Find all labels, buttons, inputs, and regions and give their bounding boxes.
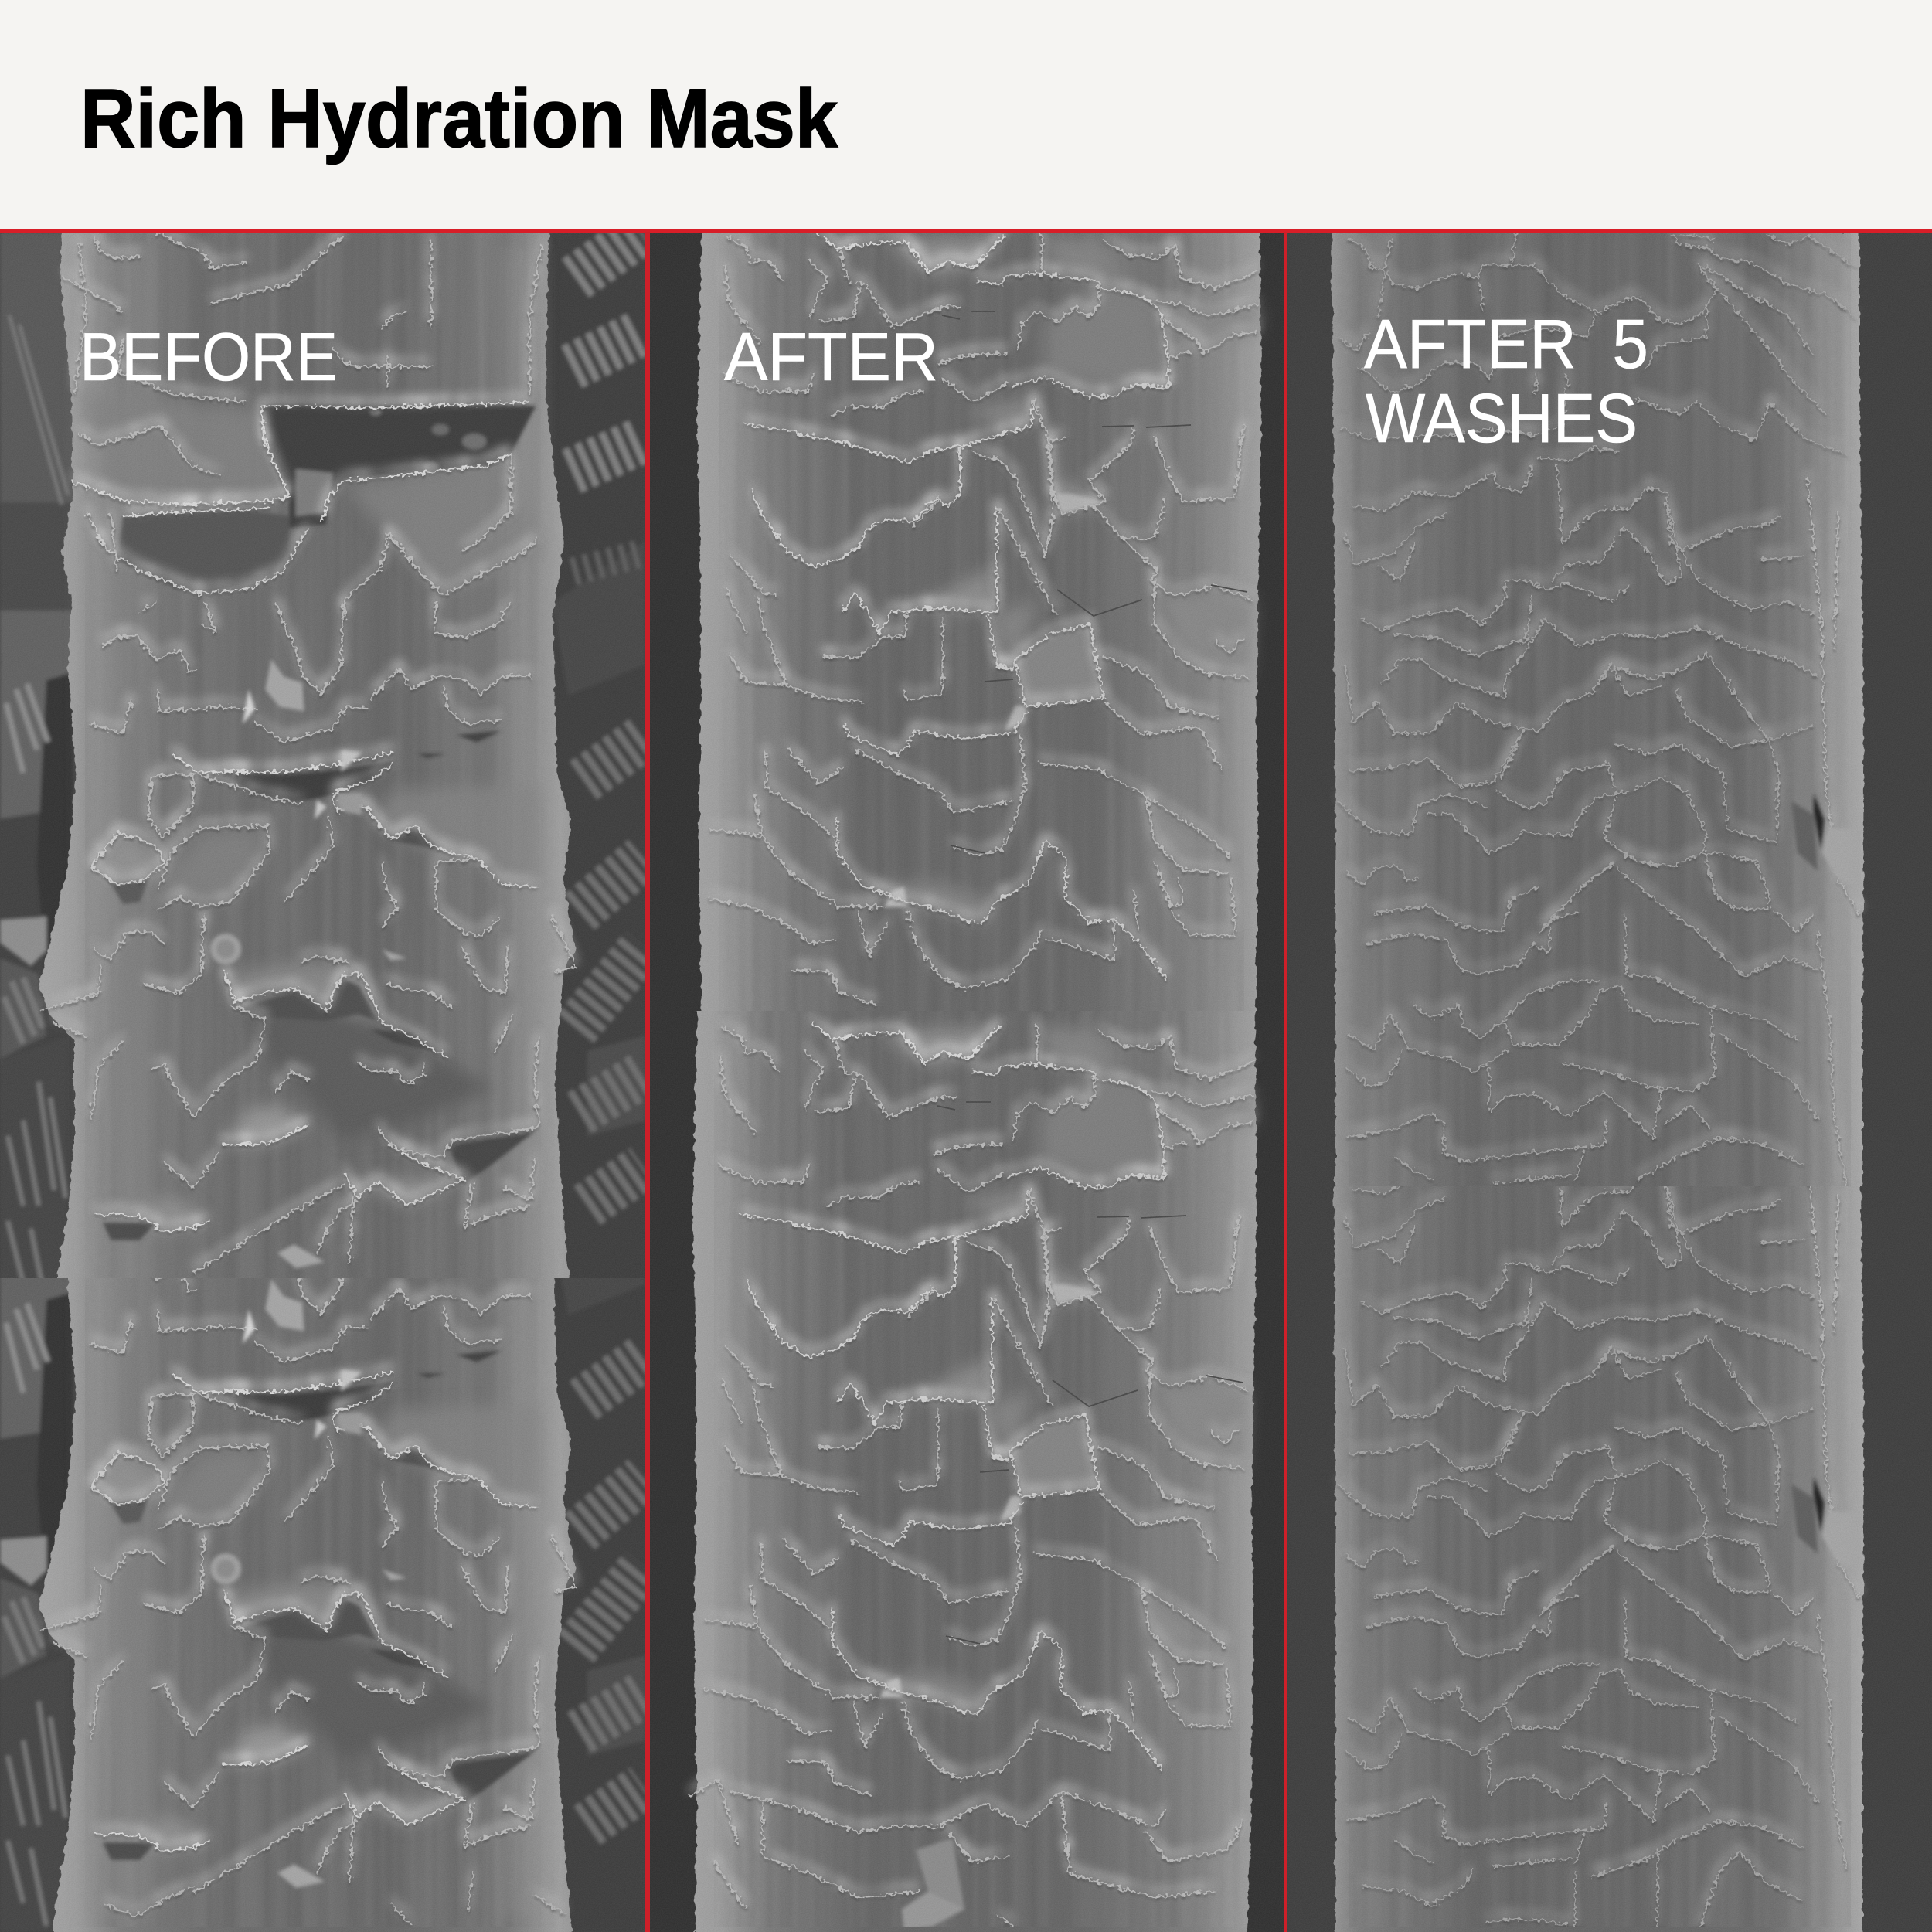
- flake shading before: [77, 247, 542, 1298]
- title: Rich Hydration Mask: [80, 71, 838, 165]
- dust particles and flakes: [210, 659, 407, 1268]
- horizontal red rule: [0, 229, 1932, 233]
- panel: after 5 washes hair micrograph: [1287, 232, 1932, 1932]
- cuticle edges after: [709, 233, 1259, 1005]
- label: after: AFTER: [724, 318, 938, 395]
- cuticle tear with black notch: [1791, 791, 1859, 885]
- bright square flake after: [884, 494, 1106, 907]
- hair shaft after: [697, 209, 1261, 1141]
- hair shaft after 5 washes: [1332, 232, 1864, 1249]
- label: after 5 washes: WASHES: [1366, 380, 1638, 457]
- panel: after 5 washes hair repeat: [1332, 915, 1864, 1932]
- label: after 5 washes: AFTER 5: [1364, 306, 1648, 383]
- dark gaps in the shaft: [103, 406, 536, 1240]
- red divider between before and after: [645, 232, 650, 1932]
- panel: after hair repeat: [689, 999, 1257, 1932]
- flake shading after: [859, 237, 1257, 925]
- panel: after hair micrograph: [650, 209, 1284, 1932]
- cuticle edges before: [41, 233, 576, 1273]
- header band: [0, 0, 1932, 229]
- hair shaft before: [39, 232, 576, 1312]
- panel: before hair repeat: [0, 852, 645, 1932]
- cuticle edges after 5 washes: [1337, 234, 1859, 1185]
- label: after 5 washes: [1364, 306, 1648, 457]
- flake at bottom of after panel: [902, 1838, 964, 1930]
- dark slits after: [942, 311, 1247, 853]
- label: before: BEFORE: [80, 318, 338, 395]
- cuticle edges at bottom of after panel: [689, 1779, 1243, 1927]
- red divider between after and after 5 washes: [1284, 232, 1287, 1932]
- panel: before hair micrograph: [0, 232, 645, 1932]
